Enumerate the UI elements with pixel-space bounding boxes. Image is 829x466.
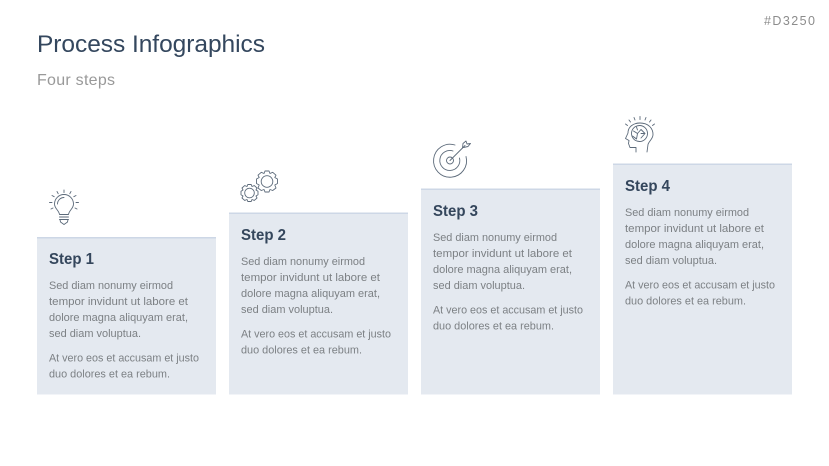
panel: step 3 bbox=[421, 188, 600, 394]
text block: step 4 first paragraph bbox=[625, 207, 765, 267]
text block: step 4 second paragraph: At vero eos et accusam et justo bbox=[625, 280, 775, 292]
text block: step 3 first paragraph bbox=[433, 232, 573, 292]
icon: target with arrow bbox=[434, 141, 470, 177]
subtitle: Four steps bbox=[37, 72, 115, 89]
text block: step 3 second paragraph: duo dolores et ea rebum. bbox=[433, 320, 554, 332]
panel: step 1 bbox=[37, 237, 216, 394]
panel: step 2 bbox=[229, 212, 408, 394]
icon: light bulb bbox=[50, 190, 78, 224]
heading: step 4: Step 4 bbox=[625, 178, 670, 195]
text block: step 2 second paragraph: duo dolores et ea rebum. bbox=[241, 344, 362, 356]
text block: step 4 first paragraph: sed diam voluptua. bbox=[625, 255, 717, 267]
heading: step 2: Step 2 bbox=[241, 227, 286, 244]
text block: step 1 first paragraph: dolore magna aliquyam erat, bbox=[49, 312, 188, 324]
title: Process Infographics bbox=[37, 31, 265, 58]
text block: step 2 first paragraph: sed diam voluptua. bbox=[241, 304, 333, 316]
code label: #D3250 bbox=[764, 14, 815, 28]
text block: step 3 first paragraph: tempor invidunt ut labore et bbox=[433, 248, 573, 260]
text block: step 1 first paragraph bbox=[49, 280, 189, 340]
text block: step 3 second paragraph: At vero eos et accusam et justo bbox=[433, 304, 583, 316]
icon: head with brain bbox=[626, 116, 654, 152]
text block: step 3 second paragraph bbox=[433, 304, 583, 332]
icon: gears bbox=[241, 171, 278, 202]
text block: step 2 first paragraph: dolore magna aliquyam erat, bbox=[241, 288, 380, 300]
text block: step 2 first paragraph bbox=[241, 256, 381, 316]
text block: step 2 first paragraph: Sed diam nonumy eirmod bbox=[241, 256, 365, 268]
text block: step 3 first paragraph: dolore magna aliquyam erat, bbox=[433, 264, 572, 276]
text block: step 1 first paragraph: sed diam voluptua. bbox=[49, 328, 141, 340]
text block: step 1 second paragraph: duo dolores et ea rebum. bbox=[49, 368, 170, 380]
text block: step 2 second paragraph: At vero eos et accusam et justo bbox=[241, 328, 391, 340]
text block: step 4 first paragraph: dolore magna aliquyam erat, bbox=[625, 239, 764, 251]
text block: step 1 second paragraph bbox=[49, 352, 199, 380]
heading: step 3: Step 3 bbox=[433, 203, 478, 220]
text block: step 4 first paragraph: tempor invidunt ut labore et bbox=[625, 223, 765, 235]
text block: step 1 first paragraph: Sed diam nonumy eirmod bbox=[49, 280, 173, 292]
text block: step 4 second paragraph bbox=[625, 280, 775, 308]
text block: step 1 second paragraph: At vero eos et accusam et justo bbox=[49, 352, 199, 364]
text block: step 2 second paragraph bbox=[241, 328, 391, 356]
text block: step 3 first paragraph: sed diam voluptua. bbox=[433, 280, 525, 292]
text block: step 1 first paragraph: tempor invidunt ut labore et bbox=[49, 296, 189, 308]
heading: step 1: Step 1 bbox=[49, 251, 94, 268]
text block: step 2 first paragraph: tempor invidunt ut labore et bbox=[241, 272, 381, 284]
panel: step 4 bbox=[613, 164, 792, 394]
text block: step 4 first paragraph: Sed diam nonumy eirmod bbox=[625, 207, 749, 219]
text block: step 4 second paragraph: duo dolores et ea rebum. bbox=[625, 296, 746, 308]
text block: step 3 first paragraph: Sed diam nonumy eirmod bbox=[433, 232, 557, 244]
